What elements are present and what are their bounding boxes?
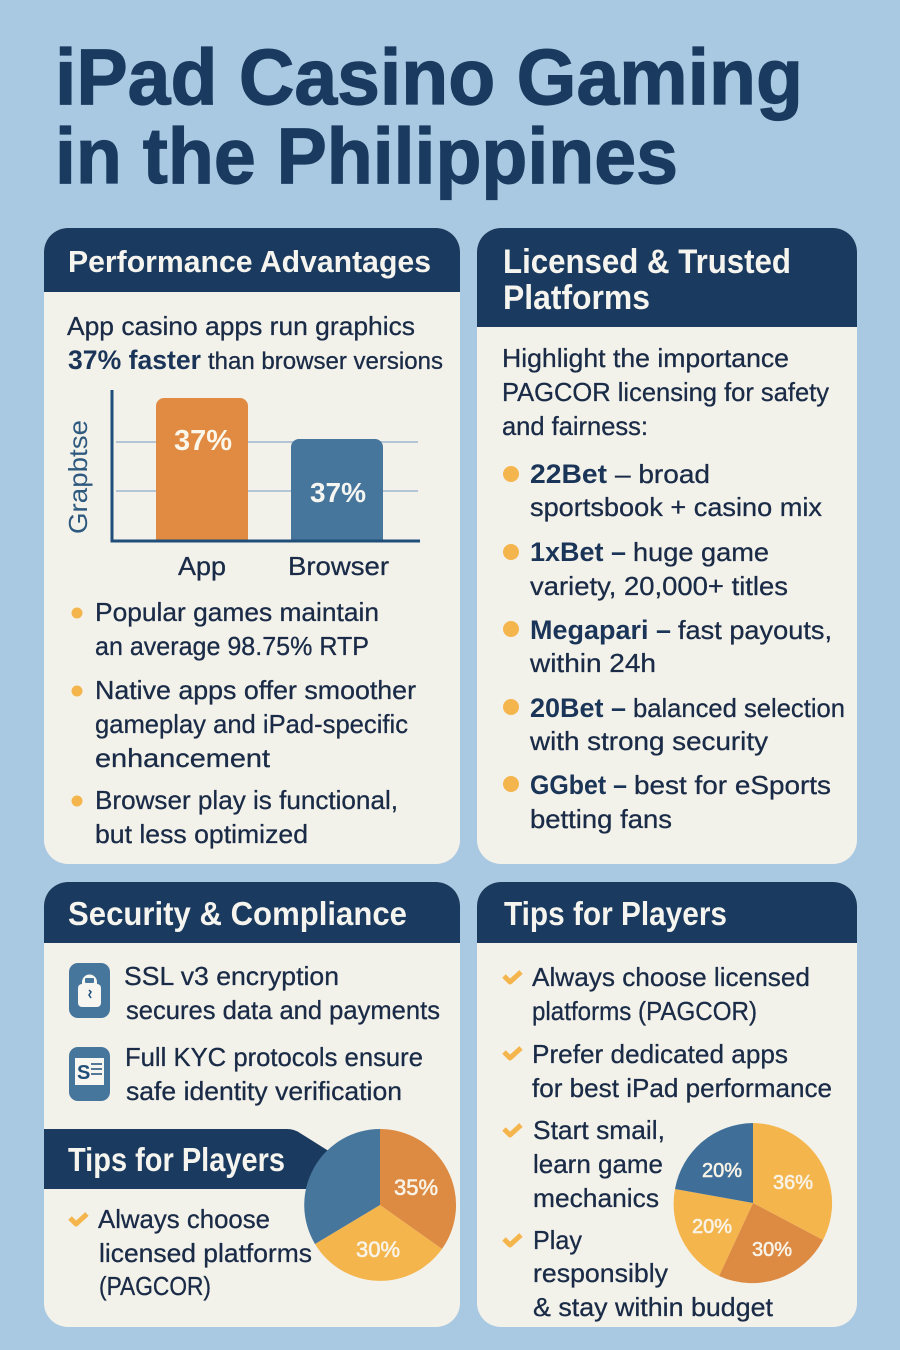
bullet list: platforms: – broad <box>615 459 710 489</box>
pie chart: security panel: 35% <box>394 1175 438 1200</box>
y axis label: Grapbtse <box>63 420 93 534</box>
heading: licensed and trusted platforms: Platforms <box>503 279 650 317</box>
text block: licensing intro: Highlight the importance <box>502 343 789 373</box>
bar: browser <box>291 439 383 541</box>
checklist: player tips: Always choose licensed <box>532 962 810 992</box>
text block: identity verification: Full KYC protocols ensure <box>125 1042 423 1072</box>
text block: licensing intro: and fairness: <box>502 411 648 441</box>
bullet list: platforms: sportsbook + casino mix <box>530 492 822 522</box>
text block: encryption: secures data and payments <box>126 995 440 1025</box>
bar value: app: 37% <box>174 425 232 457</box>
pie chart: security panel <box>304 1129 456 1281</box>
checklist: player tips: learn game <box>533 1149 663 1179</box>
bullet list: platforms: with strong security <box>529 726 768 756</box>
checklist: player tips: platforms (PAGCOR) <box>532 996 757 1026</box>
bullet list: platforms: fast payouts, <box>678 615 832 645</box>
bullet list: performance notes: Popular games maintain <box>95 597 379 627</box>
title: iPad Casino Gaming <box>55 32 803 121</box>
icon: padlock <box>69 963 110 1018</box>
bar: app <box>156 398 248 541</box>
bullet list: platforms <box>503 459 845 834</box>
bullet list: performance notes: an average 98.75% RTP <box>95 631 369 661</box>
checklist: licensed platforms tip: (PAGCOR) <box>99 1271 211 1301</box>
bullet list: platforms: betting fans <box>530 804 672 834</box>
bar value: browser: 37% <box>310 477 366 508</box>
text block: speed claim: 37% faster <box>68 345 201 375</box>
icon: identity card <box>69 1047 110 1101</box>
panel: licensed and trusted platforms <box>477 228 857 864</box>
checklist: player tips: & stay within budget <box>533 1292 774 1322</box>
icon: identity card: S <box>77 1062 90 1084</box>
bullet list: platforms: within 24h <box>529 648 656 678</box>
checklist: licensed platforms tip: licensed platforms <box>99 1238 312 1268</box>
panel: security and compliance <box>44 882 460 1327</box>
checklist: player tips: Start smail, <box>533 1115 665 1145</box>
checklist: player tips: responsibly <box>533 1258 668 1288</box>
bullet list: performance notes <box>72 597 416 849</box>
bullet list: performance notes: enhancement <box>95 743 271 773</box>
text block: speed claim: than browser versions <box>208 348 443 375</box>
bullet list: platforms: huge game <box>633 537 769 567</box>
checklist: player tips <box>504 962 832 1322</box>
bullet list: platforms: Megapari – <box>530 615 671 645</box>
panel: tips for players <box>477 882 857 1327</box>
heading: licensed and trusted platforms <box>477 228 857 327</box>
bullet list: platforms: balanced selection <box>633 693 845 723</box>
bullet list: performance notes: Browser play is functional, <box>95 785 398 815</box>
pie chart: player tips: 20% <box>692 1216 732 1238</box>
pie chart: player tips: 30% <box>752 1239 792 1261</box>
bullet list: platforms: 22Bet <box>530 459 607 489</box>
bar chart: app vs browser <box>63 390 420 581</box>
text block: identity verification: safe identity verification <box>126 1076 402 1106</box>
bullet list: performance notes: Native apps offer smoother <box>95 675 416 705</box>
checklist: licensed platforms tip: Always choose <box>98 1204 270 1234</box>
text block: encryption <box>124 961 440 1025</box>
pie chart: player tips: 36% <box>773 1172 813 1194</box>
heading: performance advantages: Performance Advantages <box>68 244 431 279</box>
checklist: player tips: Play <box>533 1225 582 1255</box>
pie chart: security panel: 30% <box>356 1237 400 1262</box>
checklist: player tips: for best iPad performance <box>532 1073 832 1103</box>
heading: security and compliance <box>44 882 460 943</box>
text block: speed claim: App casino apps run graphics <box>67 311 415 341</box>
checklist: player tips: mechanics <box>533 1183 659 1213</box>
text block: encryption: SSL v3 encryption <box>124 961 339 991</box>
bullet list: performance notes: but less optimized <box>95 819 308 849</box>
heading: performance advantages <box>44 228 460 292</box>
text block: licensing intro <box>502 343 829 441</box>
bullet list: platforms: variety, 20,000+ titles <box>530 571 788 601</box>
heading: tips for players banner: Tips for Players <box>68 1141 285 1178</box>
panel: performance advantages <box>44 228 460 864</box>
heading: tips for players banner <box>44 1129 335 1189</box>
category label: browser: Browser <box>288 551 389 581</box>
text block: licensing intro: PAGCOR licensing for safety <box>502 377 829 407</box>
pie chart: player tips: 20% <box>702 1160 742 1182</box>
pie chart: player tips <box>674 1123 832 1283</box>
heading: tips for players: Tips for Players <box>504 895 727 932</box>
bullet list: platforms: 1xBet – <box>530 537 626 567</box>
text block: identity verification <box>125 1042 423 1106</box>
category label: app: App <box>178 551 226 581</box>
checklist: player tips: Prefer dedicated apps <box>532 1039 788 1069</box>
bullet list: platforms: 20Bet – <box>530 693 626 723</box>
text block: speed claim <box>67 311 443 375</box>
heading: licensed and trusted platforms: Licensed & Trusted <box>503 243 791 281</box>
heading: security and compliance: Security & Compliance <box>68 895 407 932</box>
bullet list: platforms: best for eSports <box>634 770 831 800</box>
title <box>55 32 803 200</box>
title: in the Philippines <box>55 111 678 200</box>
heading: tips for players <box>477 882 857 943</box>
bullet list: platforms: GGbet – <box>530 770 627 800</box>
bullet list: performance notes: gameplay and iPad-specific <box>95 709 408 739</box>
checklist: licensed platforms tip <box>70 1204 312 1301</box>
